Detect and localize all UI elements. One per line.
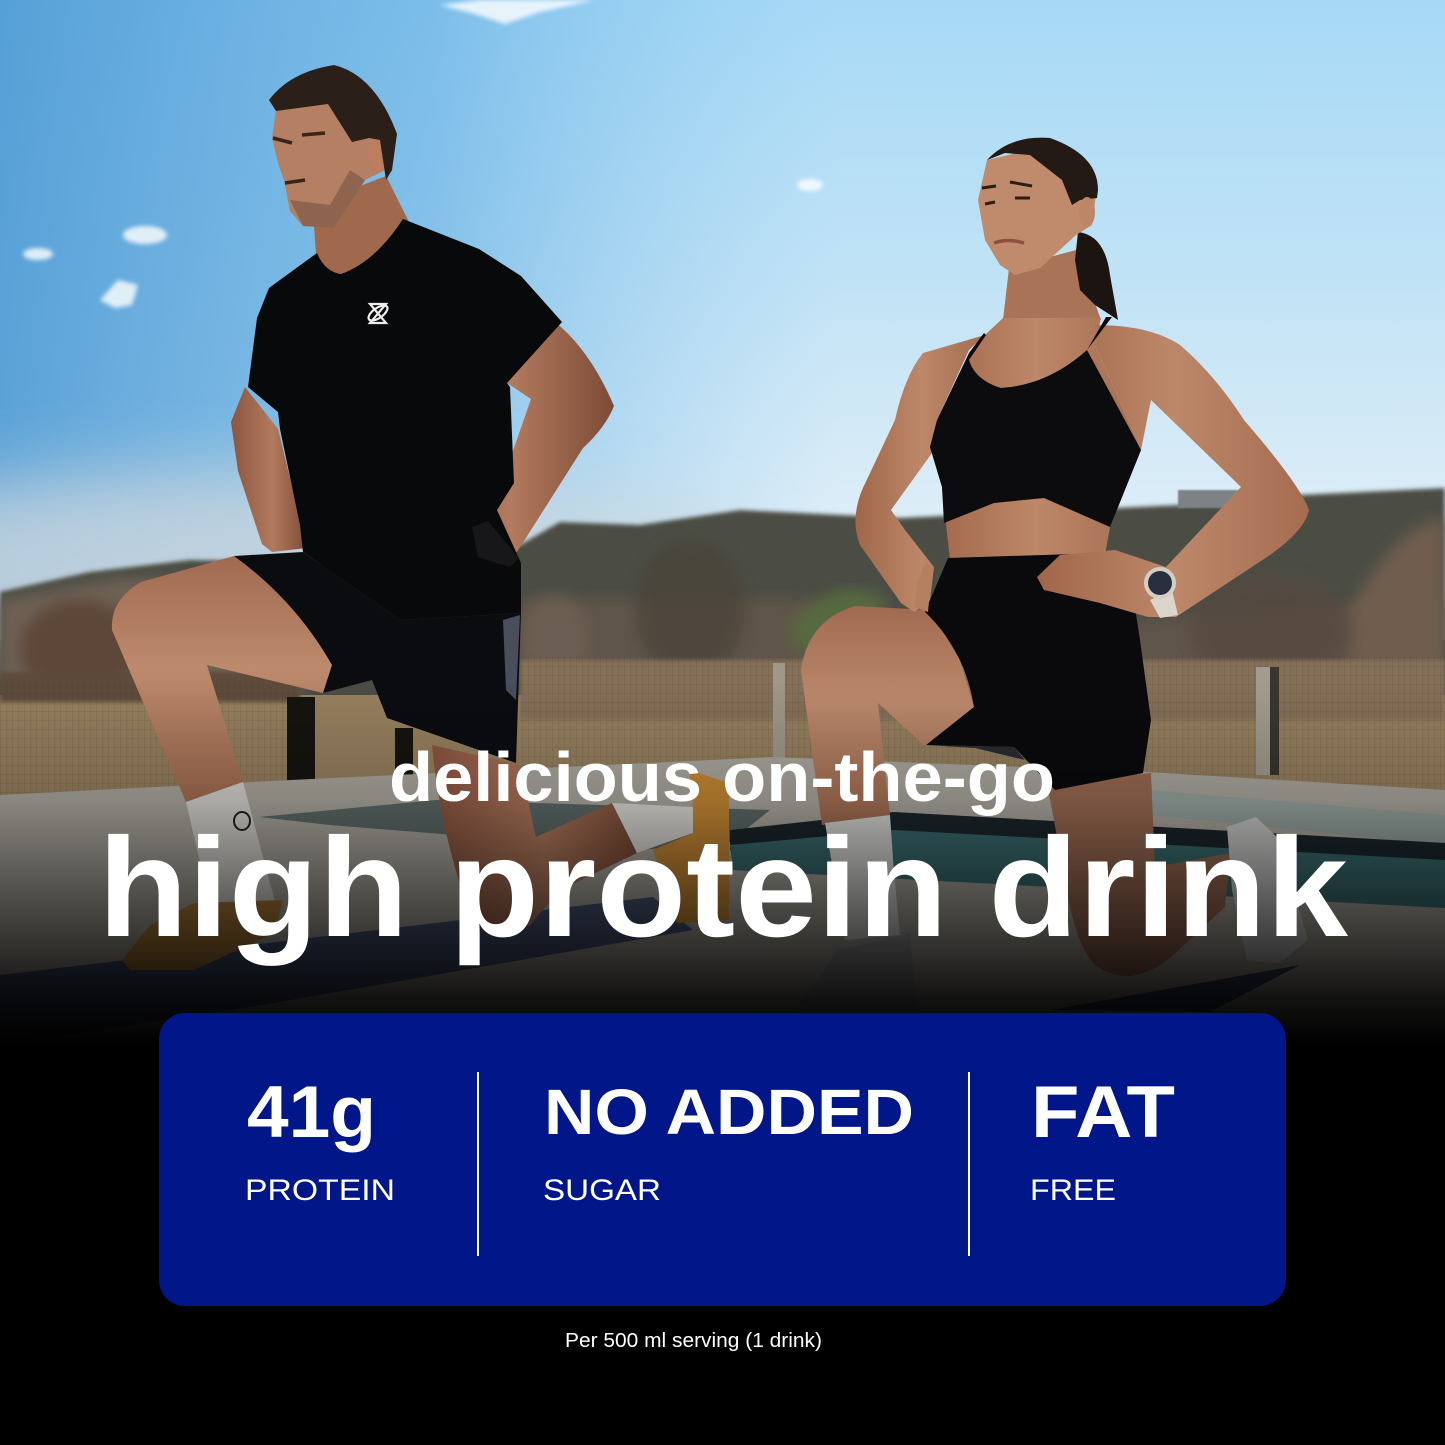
man ear xyxy=(368,135,390,171)
man back sock xyxy=(612,803,693,853)
stat: protein: 41g xyxy=(247,1072,376,1153)
panel: nutrition claims xyxy=(159,1013,1286,1306)
woman watch xyxy=(1144,567,1178,618)
stat: sugar xyxy=(543,1076,914,1207)
stat: protein: PROTEIN xyxy=(245,1174,395,1207)
dark fade overlay xyxy=(0,680,1445,1046)
man beard shadow xyxy=(290,170,365,228)
woman sports bra xyxy=(930,317,1141,527)
woman ear xyxy=(1079,197,1095,227)
man right arm xyxy=(386,322,614,617)
main heading: high protein drink xyxy=(98,808,1349,966)
stat: fat: FREE xyxy=(1030,1174,1116,1207)
woman sock xyxy=(825,815,900,940)
man logo xyxy=(366,303,390,323)
woman torso xyxy=(930,318,1141,560)
man figure xyxy=(112,65,729,970)
stat: sugar: SUGAR xyxy=(543,1174,661,1207)
man eyes and mouth xyxy=(273,133,325,183)
woman eyes and mouth xyxy=(982,182,1032,204)
footnote: Per 500 ml serving (1 drink) xyxy=(565,1330,822,1352)
woman shorts xyxy=(925,553,1151,790)
photo background: field and fence xyxy=(0,655,1445,805)
man back shoe xyxy=(653,770,729,923)
woman back leg xyxy=(1047,773,1231,976)
woman neck xyxy=(1003,250,1101,320)
man neck xyxy=(314,176,412,280)
woman front leg xyxy=(801,606,974,825)
photo background: pool deck and water xyxy=(0,757,1445,1050)
man t-shirt xyxy=(248,219,562,620)
woman ponytail xyxy=(1075,232,1118,320)
man watch xyxy=(472,521,519,567)
woman front shoe xyxy=(797,933,918,1010)
man hair xyxy=(269,65,397,180)
man left arm xyxy=(231,387,307,552)
woman left arm xyxy=(855,335,985,612)
man front shoe xyxy=(122,900,283,970)
man head xyxy=(272,95,385,228)
woman head xyxy=(978,150,1096,275)
photo background: hills and trees xyxy=(0,488,1445,740)
woman right arm xyxy=(1037,325,1309,617)
woman back shoe xyxy=(1227,817,1308,963)
stat: fat: FAT xyxy=(1031,1072,1175,1153)
black base xyxy=(0,1045,1445,1445)
woman left hand xyxy=(914,562,934,612)
man back leg xyxy=(432,745,637,931)
stat: fat xyxy=(1030,1072,1175,1207)
woman hair xyxy=(987,138,1098,205)
man sock logo xyxy=(234,812,250,830)
sub-heading: delicious on-the-go xyxy=(389,738,1055,816)
woman figure xyxy=(797,138,1309,1010)
stat: sugar: NO ADDED xyxy=(544,1076,914,1148)
photo background: sky xyxy=(0,0,1445,690)
man front leg xyxy=(112,556,335,802)
man sock xyxy=(186,782,276,905)
stat: protein xyxy=(245,1072,395,1207)
man shorts xyxy=(234,552,521,763)
